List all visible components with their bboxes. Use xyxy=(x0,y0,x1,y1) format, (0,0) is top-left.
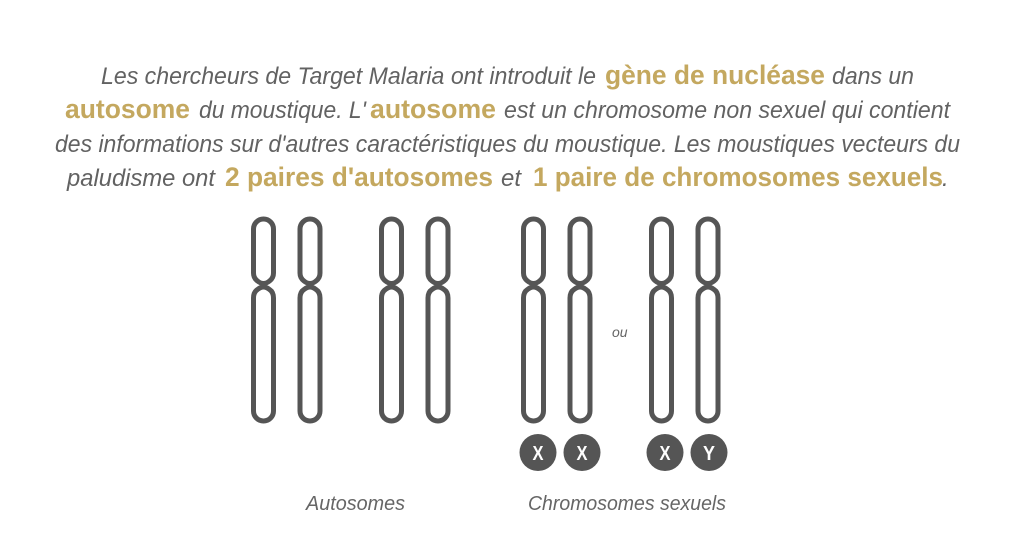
chromosome 7 xyxy=(652,219,672,421)
chromosome 3 xyxy=(382,219,402,421)
badge: X xyxy=(564,434,600,471)
text line 4: . xyxy=(942,165,949,192)
text line 4: paludisme ont xyxy=(66,165,216,192)
text line 1: dans un xyxy=(832,63,914,90)
label: ou: ou xyxy=(612,324,628,340)
label: Autosomes: Autosomes xyxy=(305,493,405,515)
text line 2: est un chromosome non sexuel qui contient xyxy=(504,97,951,124)
chromosome 2 xyxy=(300,219,320,421)
sex chromosome pairs xyxy=(524,219,718,421)
text line 2: autosome xyxy=(65,94,190,124)
text line 2: autosome xyxy=(370,94,496,124)
text line 2: du moustique. L' xyxy=(199,97,367,124)
text line 4: 2 paires d'autosomes xyxy=(225,162,493,192)
label: Chromosomes sexuels: Chromosomes sexuels xyxy=(528,493,726,515)
text line 1 xyxy=(101,60,914,90)
badge: X: X xyxy=(576,443,588,465)
chromosome 1 xyxy=(254,219,274,421)
text line 3: des informations sur d'autres caractéristiques du moustique. Les moustiques vecteurs du xyxy=(55,131,960,158)
chromosome 5 xyxy=(524,219,544,421)
text line 4: et xyxy=(501,165,522,192)
text line 4: 1 paire de chromosomes sexuels xyxy=(533,162,943,192)
chromosome 4 xyxy=(428,219,448,421)
badge: X xyxy=(646,434,684,471)
chromosome 6 xyxy=(570,219,590,421)
badge: X: X xyxy=(532,443,544,465)
badge: X xyxy=(520,434,556,471)
text line 2 xyxy=(65,94,951,124)
text line 4 xyxy=(66,162,949,192)
badge: Y xyxy=(690,434,728,471)
badge: Y: Y xyxy=(703,443,716,465)
chromosome 8 xyxy=(698,219,718,421)
intro paragraph xyxy=(55,60,960,192)
badge: X: X xyxy=(660,443,671,465)
autosome pairs xyxy=(254,219,448,421)
text line 1: Les chercheurs de Target Malaria ont introduit le xyxy=(101,63,596,90)
text line 1: gène de nucléase xyxy=(605,60,825,90)
